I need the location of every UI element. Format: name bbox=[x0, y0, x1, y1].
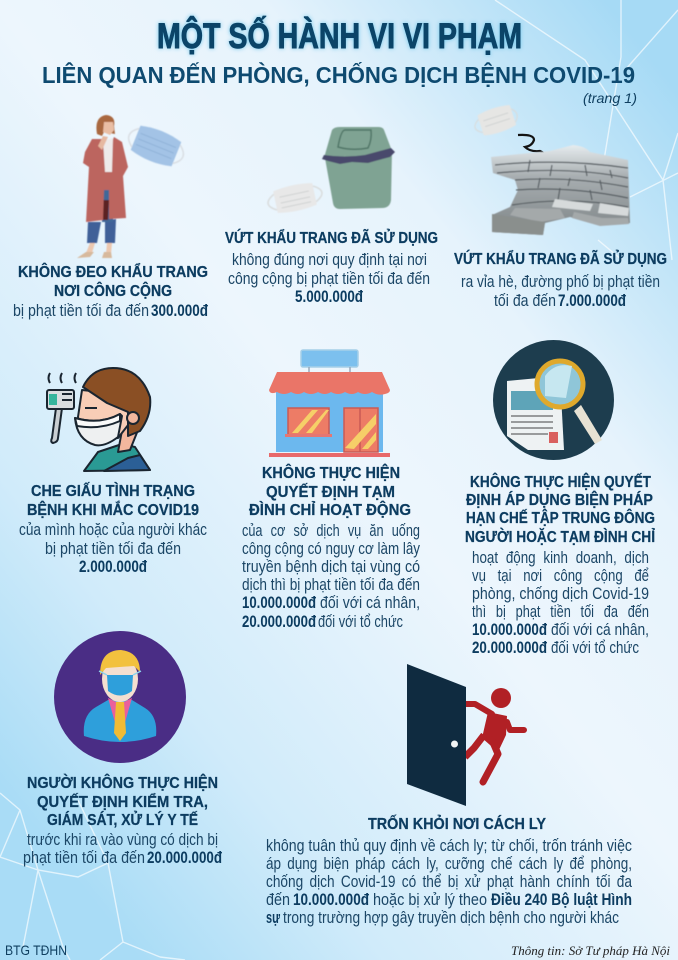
icon: magnifier over document bbox=[493, 340, 614, 460]
panel: used mask on pavement: tối đa đến bbox=[494, 292, 556, 310]
panel: escaping quarantine bbox=[266, 664, 633, 927]
panel: hiding illness: 2.000.000đ bbox=[79, 558, 147, 576]
icon: trash bin bbox=[322, 127, 395, 209]
body: trước khi ra vào vùng có dịch bị bbox=[27, 831, 218, 849]
panel: used mask wrong place bbox=[225, 127, 438, 306]
panel: gathering restrictions: đối với tổ chức bbox=[551, 639, 639, 657]
panel: used mask on pavement: 7.000.000đ bbox=[558, 292, 626, 310]
icon: blue face mask bbox=[123, 120, 189, 172]
body: của cơ sở dịch vụ ăn uống bbox=[242, 522, 420, 540]
panel: shop suspension: 20.000.000đ bbox=[242, 613, 316, 631]
panel: escaping quarantine: 10.000.000đ bbox=[293, 891, 369, 909]
body: bị phạt tiền tối đa đến bbox=[13, 302, 149, 320]
body: không đúng nơi quy định tại nơi bbox=[232, 251, 427, 269]
panel: shop suspension: QUYẾT ĐỊNH TẠM bbox=[266, 482, 395, 501]
icon: temperature check person bbox=[47, 368, 150, 471]
icon: woman in coat bbox=[77, 115, 128, 258]
title: MỘT SỐ HÀNH VI VI PHẠM bbox=[157, 16, 522, 56]
icon: runner leaving door bbox=[407, 664, 524, 806]
footer credit: BTG TĐHN bbox=[5, 942, 67, 958]
heading: TRỐN KHỎI NƠI CÁCH LY bbox=[368, 813, 546, 833]
panel: shop suspension: ĐÌNH CHỈ HOẠT ĐỘNG bbox=[249, 500, 411, 519]
heading: CHE GIẤU TÌNH TRẠNG bbox=[31, 481, 195, 500]
panel: shop suspension: đối với cá nhân, bbox=[320, 594, 420, 612]
subtitle: LIÊN QUAN ĐẾN PHÒNG, CHỐNG DỊCH BỆNH COVID-19 bbox=[42, 61, 635, 88]
panel: escaping quarantine: hoặc bị xử lý theo bbox=[373, 891, 487, 909]
panel: gathering restrictions: ĐỊNH ÁP DỤNG BIỆN PHÁP bbox=[466, 490, 653, 509]
panel: gathering restrictions: 10.000.000đ bbox=[472, 621, 547, 639]
panel: escaping quarantine: đến bbox=[266, 891, 290, 909]
icon: shop bbox=[269, 350, 390, 457]
panel: shop suspension: dịch thì bị phạt tiền tối đa đến bbox=[242, 576, 420, 594]
panel: shop suspension bbox=[242, 350, 421, 631]
icon: used mask small bbox=[471, 102, 521, 139]
panel: refusing medical checks bbox=[23, 631, 222, 867]
panel: refusing medical checks: phạt tiền tối đa đến bbox=[23, 849, 145, 867]
panel: shop suspension: 10.000.000đ bbox=[242, 594, 316, 612]
icon: squiggle arrow bbox=[518, 135, 552, 165]
panel: no mask in public: 300.000đ bbox=[151, 302, 208, 320]
panel: shop suspension: truyền bệnh dịch tại vùng có bbox=[242, 558, 420, 576]
panel: gathering restrictions bbox=[465, 340, 655, 657]
icon: cobblestone pavement bbox=[491, 145, 630, 235]
icon: man with mask in purple circle bbox=[54, 631, 186, 763]
panel: used mask wrong place: 5.000.000đ bbox=[295, 288, 363, 306]
panel: escaping quarantine: sự bbox=[266, 909, 280, 927]
panel: refusing medical checks: QUYẾT ĐỊNH KIỂM TRA, bbox=[37, 792, 208, 811]
heading: KHÔNG THỰC HIỆN QUYẾT bbox=[470, 472, 651, 491]
heading: KHÔNG THỰC HIỆN bbox=[262, 463, 400, 482]
panel: gathering restrictions: 20.000.000đ bbox=[472, 639, 547, 657]
panel: escaping quarantine: trong trường hợp gây truyền dịch bệnh cho người khác bbox=[283, 909, 619, 927]
panel: hiding illness bbox=[19, 368, 207, 576]
panel: shop suspension: công cộng có nguy cơ làm lây bbox=[242, 540, 421, 558]
panel: refusing medical checks: GIÁM SÁT, XỬ LÝ Y TẾ bbox=[47, 810, 198, 829]
body: của mình hoặc của người khác bbox=[19, 521, 207, 539]
panel: no mask in public: NƠI CÔNG CỘNG bbox=[54, 281, 172, 300]
heading: KHÔNG ĐEO KHẨU TRANG bbox=[18, 262, 208, 281]
heading: VỨT KHẨU TRANG ĐÃ SỬ DỤNG bbox=[225, 227, 438, 247]
panel: gathering restrictions: phòng, chống dịch Covid-19 bbox=[472, 585, 649, 603]
panel: shop suspension: đối với tổ chức bbox=[318, 613, 403, 631]
footer source: Thông tin: Sở Tư pháp Hà Nội bbox=[511, 944, 671, 958]
panel: hiding illness: bị phạt tiền tối đa đến bbox=[45, 540, 181, 558]
panel: no mask in public bbox=[13, 115, 208, 320]
panel: hiding illness: BỆNH KHI MẮC COVID19 bbox=[27, 500, 199, 519]
panel: gathering restrictions: đối với cá nhân, bbox=[551, 621, 649, 639]
heading: NGƯỜI KHÔNG THỰC HIỆN bbox=[27, 773, 218, 792]
panel: used mask on pavement bbox=[454, 102, 667, 310]
panel: escaping quarantine: Điều 240 Bộ luật Hình bbox=[491, 891, 632, 909]
panel: refusing medical checks: 20.000.000đ bbox=[147, 849, 222, 867]
panel: used mask wrong place: công cộng bị phạt tiền tối đa đến bbox=[228, 270, 430, 288]
page note: (trang 1) bbox=[583, 90, 637, 106]
icon: used mask bbox=[265, 180, 325, 216]
